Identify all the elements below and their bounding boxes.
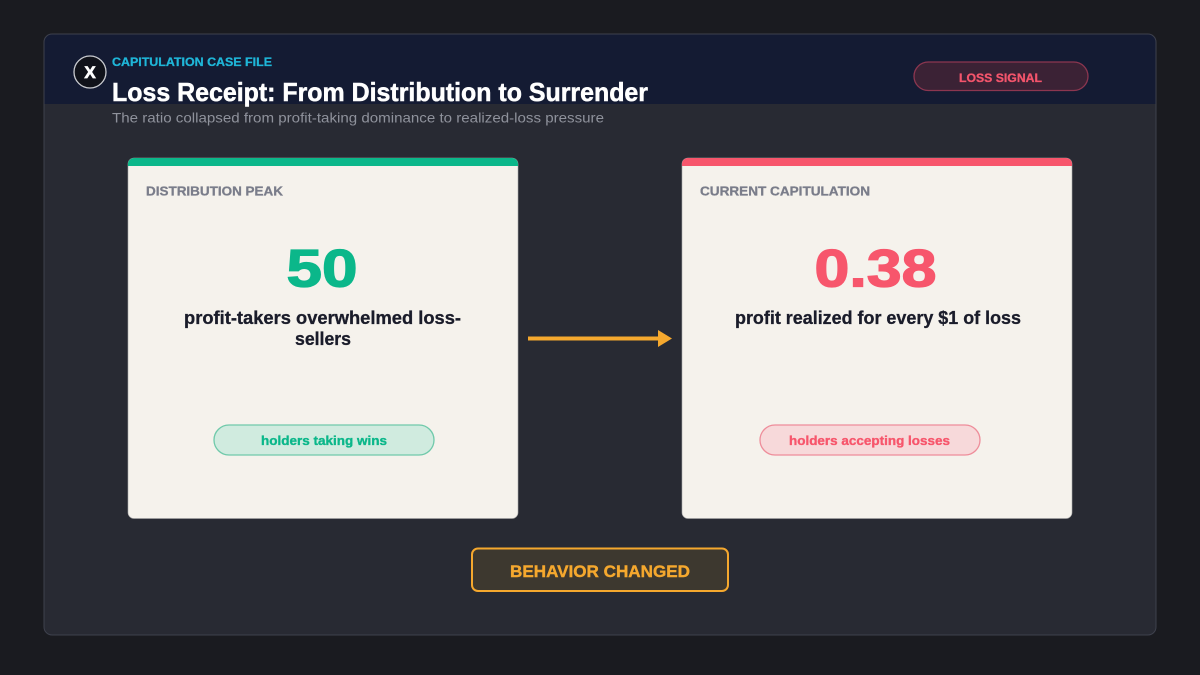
pill: holders taking wins: holders taking wins <box>261 433 387 448</box>
panel: current capitulation card <box>682 158 1072 518</box>
header band <box>44 34 1156 104</box>
description: profit-takers overwhelmed loss- <box>184 308 461 328</box>
description <box>184 308 461 349</box>
big number: 0.38: 0.38 <box>814 240 936 298</box>
pill: holders accepting losses: holders accepting losses <box>789 433 950 448</box>
description: sellers <box>295 329 351 349</box>
pill: holders accepting losses <box>760 425 980 455</box>
card label: DISTRIBUTION PEAK <box>146 184 284 198</box>
callout: behavior changed: BEHAVIOR CHANGED <box>510 562 690 581</box>
badge: loss signal: LOSS SIGNAL <box>959 71 1042 85</box>
title: Loss Receipt: From Distribution to Surrender <box>112 77 648 107</box>
panel: distribution peak card <box>128 158 518 518</box>
eyebrow label: CAPITULATION CASE FILE <box>112 55 272 69</box>
card label: CURRENT CAPITULATION <box>700 184 870 198</box>
description: profit realized for every $1 of loss <box>735 308 1021 328</box>
icon: X logo badge <box>74 56 106 88</box>
icon: X logo badge: X <box>84 63 96 82</box>
callout: behavior changed <box>472 548 728 591</box>
card top accent <box>128 158 518 166</box>
arrow: peak to capitulation <box>528 330 672 347</box>
badge: loss signal <box>914 62 1088 90</box>
subtitle: The ratio collapsed from profit-taking dominance to realized-loss pressure <box>112 110 604 126</box>
card top accent <box>682 158 1072 166</box>
big number: 50: 50 <box>286 240 358 298</box>
pill: holders taking wins <box>214 425 434 455</box>
